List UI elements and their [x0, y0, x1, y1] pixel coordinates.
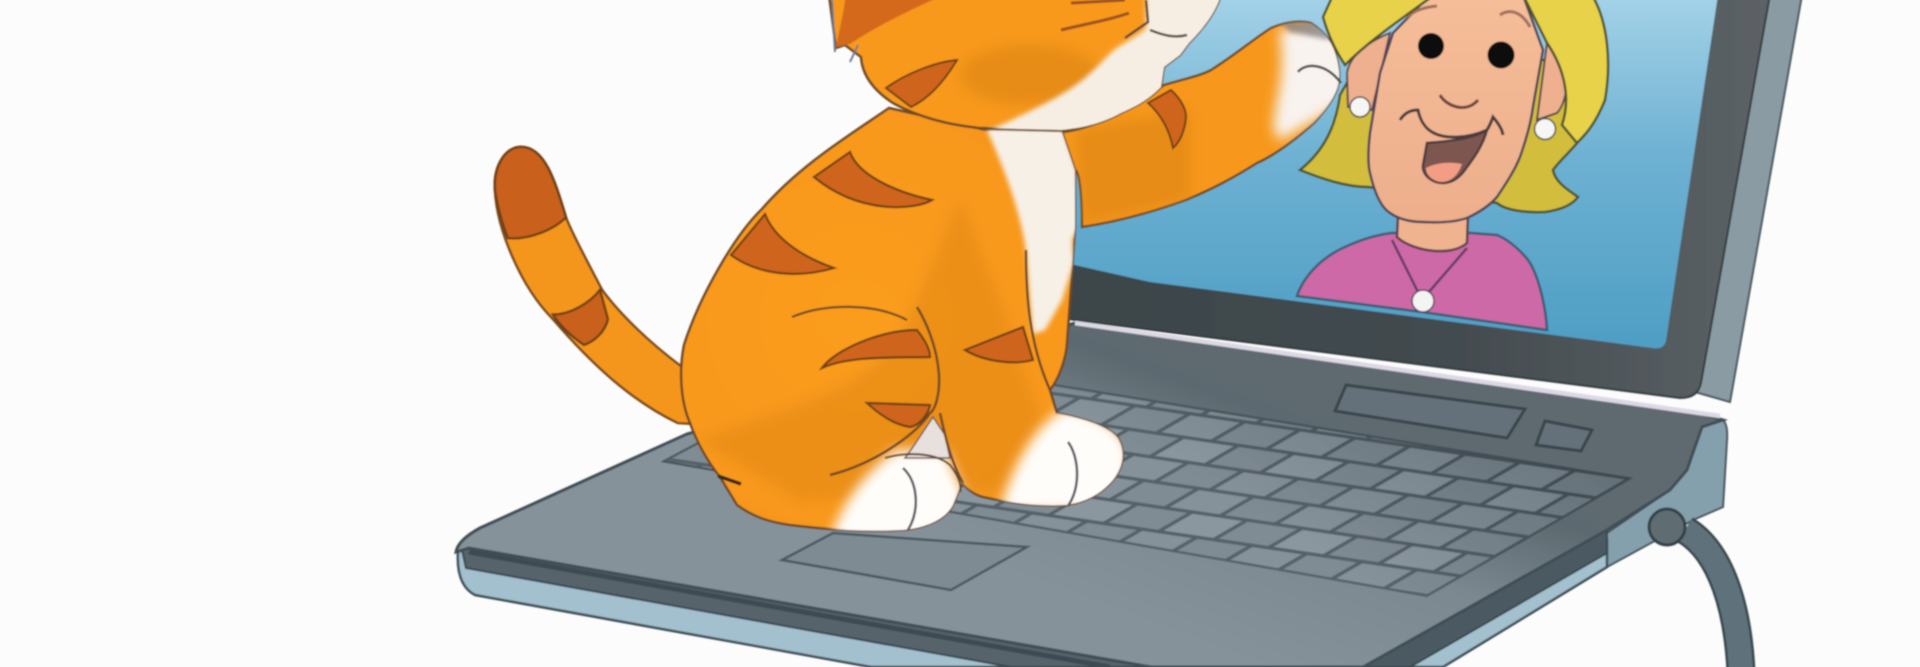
paw	[1274, 20, 1350, 140]
illustration: cat on laptop	[453, 0, 1804, 667]
earrings	[1350, 97, 1370, 117]
sweater	[1297, 233, 1547, 330]
haunch line	[792, 307, 907, 320]
neck	[1397, 215, 1468, 251]
body stripes	[731, 152, 1033, 427]
muzzle lines	[1125, 0, 1187, 38]
haunch outline	[830, 307, 939, 475]
back paw top edge	[885, 454, 961, 492]
base front light strip	[458, 540, 1607, 667]
chest	[986, 128, 1080, 334]
base front dark strip	[462, 548, 1151, 667]
front paw	[1000, 408, 1130, 512]
deck surface	[456, 323, 1723, 667]
necklace	[1392, 240, 1467, 300]
face	[1368, 0, 1543, 222]
head shading	[960, 45, 1100, 105]
arm shading	[1075, 110, 1190, 225]
laptop base	[456, 323, 1727, 667]
tail band	[553, 290, 608, 345]
screen	[1000, 0, 1718, 348]
arm stripe	[1148, 90, 1186, 148]
front leg outline	[940, 250, 1057, 483]
paw toe line	[1298, 66, 1341, 83]
head tuft	[832, 0, 858, 62]
rump notch	[718, 476, 741, 484]
tail tip	[495, 147, 566, 238]
woman on screen	[1297, 0, 1608, 330]
back paw	[830, 450, 965, 540]
smile line	[1400, 110, 1503, 137]
chin white	[987, 0, 1220, 132]
nose	[1440, 95, 1478, 107]
small button	[1536, 421, 1592, 451]
tail	[495, 147, 695, 424]
hinge highlight line	[1075, 323, 1720, 416]
far leg sliver	[905, 417, 950, 458]
keyboard	[664, 354, 1630, 597]
laptop lid	[1000, 0, 1802, 416]
mouth	[1423, 130, 1487, 183]
neck stripe	[886, 60, 957, 107]
head	[829, 0, 1230, 140]
body shading	[700, 200, 1040, 500]
cat	[495, 0, 1350, 540]
body	[681, 108, 1130, 540]
eyebrows	[1407, 6, 1530, 27]
ears	[1347, 33, 1567, 120]
base right dark strip	[1363, 530, 1607, 667]
long button	[1335, 385, 1525, 438]
back hair	[1300, 60, 1605, 212]
paw lines	[903, 442, 1077, 530]
base right side block	[1607, 420, 1727, 567]
power cable	[1649, 509, 1741, 667]
head stripe	[836, 0, 943, 47]
whisker stripes	[1061, 0, 1129, 30]
bezel	[1000, 0, 1770, 398]
lid outer side	[1695, 0, 1802, 402]
hair fringe	[1323, 0, 1608, 143]
touchpad	[782, 533, 1027, 590]
arm	[1062, 20, 1350, 227]
eyes	[1418, 33, 1444, 59]
